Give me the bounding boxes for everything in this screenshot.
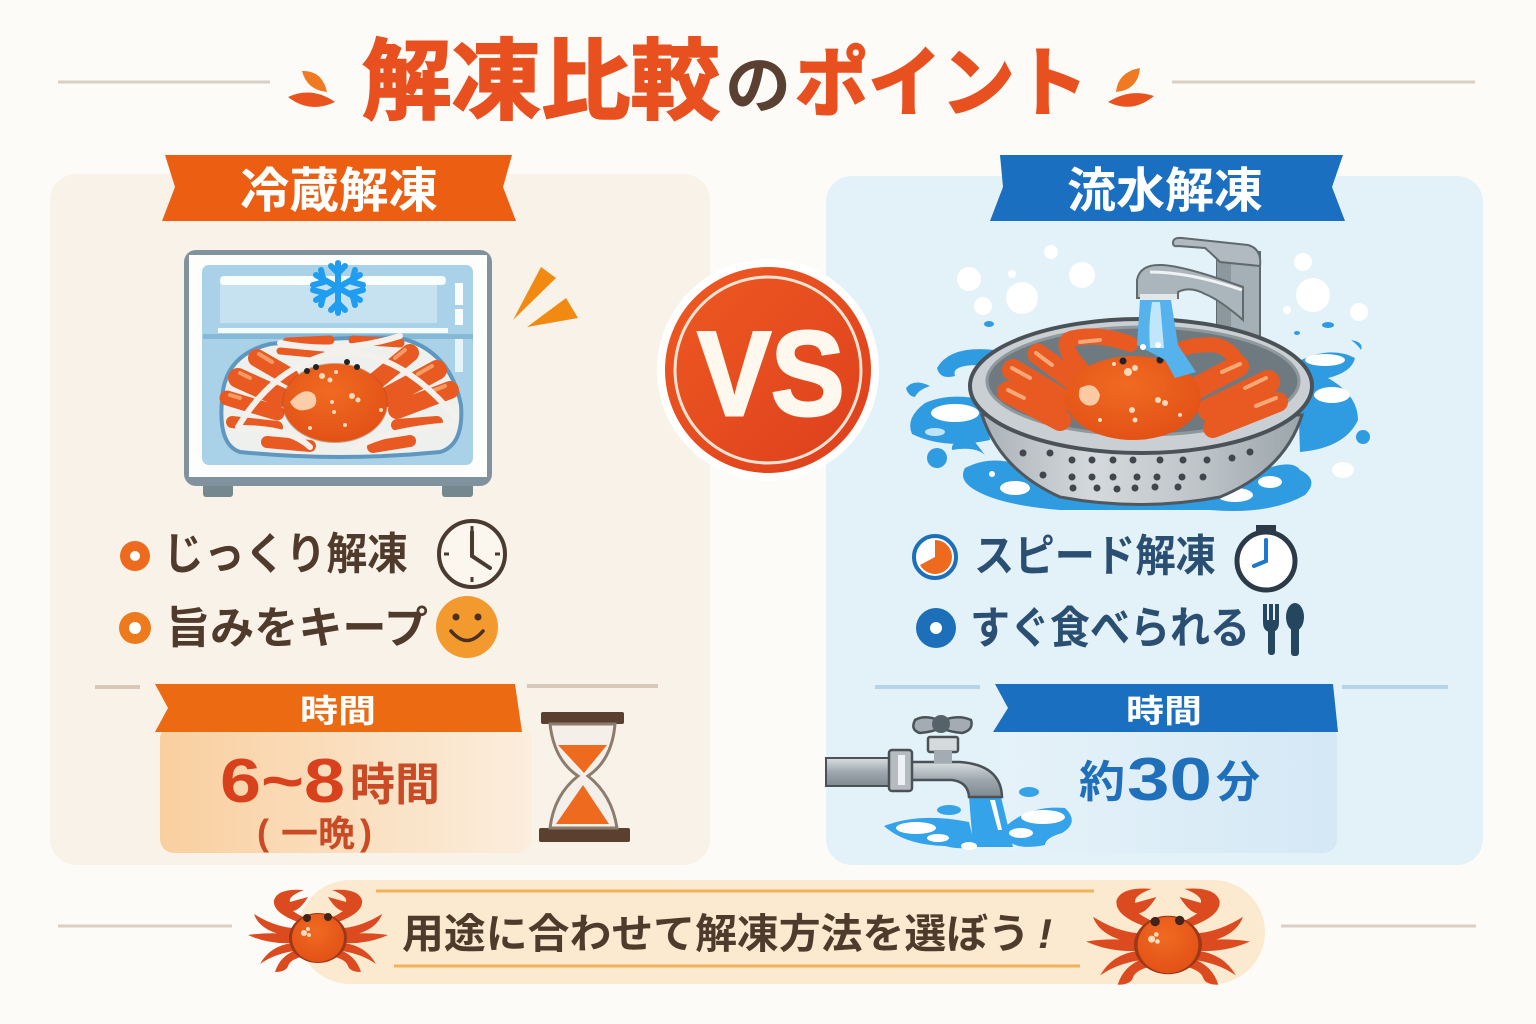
time box: refrigerator: 時間: [300, 693, 376, 729]
icon: kitchen faucet: [1137, 238, 1260, 338]
time box: refrigerator: ): [360, 812, 372, 853]
title: [58, 32, 1475, 131]
panel: running water thawing: [826, 155, 1483, 865]
bottom message banner: 用途に合わせて解凍方法を選ぼう: [402, 911, 1030, 957]
icon: bubbles and splashes: [906, 245, 1370, 511]
title: 解凍比較: [362, 32, 720, 131]
time box: running water: 時間: [1126, 693, 1202, 729]
ribbon heading: refrigerator thawing: 冷蔵解凍: [240, 165, 438, 218]
time box: running water: 分: [1216, 758, 1260, 807]
time box: refrigerator: 時間: [350, 759, 440, 810]
title: の: [725, 50, 791, 122]
bottom message banner: [58, 880, 1476, 985]
ribbon heading: running water thawing: 流水解凍: [1067, 165, 1263, 218]
icon: stopwatch: [1237, 525, 1295, 590]
VS badge: VS: [698, 307, 844, 441]
time box: running water: 約: [1079, 758, 1125, 807]
bullet: ready to eat: すぐ食べられる: [970, 604, 1250, 653]
title: ポイント: [795, 42, 1088, 127]
icon: clock: [439, 521, 505, 587]
icon: wall tap with water: [826, 715, 1072, 850]
bullet: keep flavor: 旨みをキープ: [166, 604, 428, 653]
crab in colander: [1008, 336, 1278, 440]
VS badge: [657, 259, 879, 481]
ribbon heading: running water thawing: [990, 155, 1345, 221]
bullet: slow thaw: じっくり解凍: [163, 530, 408, 579]
icon: colander with crab: [970, 319, 1312, 504]
bottom message banner: !: [1038, 910, 1052, 957]
crab in bag: [227, 340, 450, 447]
icon: attention marks: [513, 267, 578, 327]
bullet: speed thaw: スピード解凍: [974, 532, 1216, 581]
icon: refrigerator with crab: [184, 250, 492, 497]
time box: refrigerator: 一晩: [281, 813, 355, 854]
panel: refrigerator thawing: [50, 155, 710, 865]
time box: refrigerator: [95, 684, 658, 854]
icon: hourglass: [539, 712, 630, 842]
icon: crab left: [248, 890, 388, 972]
time box: running water: [875, 684, 1448, 853]
icon: water stream: [1137, 300, 1196, 378]
time box: refrigerator: 6~8: [220, 747, 345, 816]
ribbon heading: refrigerator thawing: [162, 155, 516, 221]
plastic bag: [221, 338, 461, 457]
icon: snowflake: [313, 263, 363, 313]
icon: smiley: [436, 596, 498, 658]
time box: running water: 30: [1127, 746, 1212, 813]
time box: refrigerator: (: [257, 812, 269, 853]
icon: crab right: [1086, 889, 1250, 985]
icon: fork and spoon: [1263, 603, 1304, 656]
